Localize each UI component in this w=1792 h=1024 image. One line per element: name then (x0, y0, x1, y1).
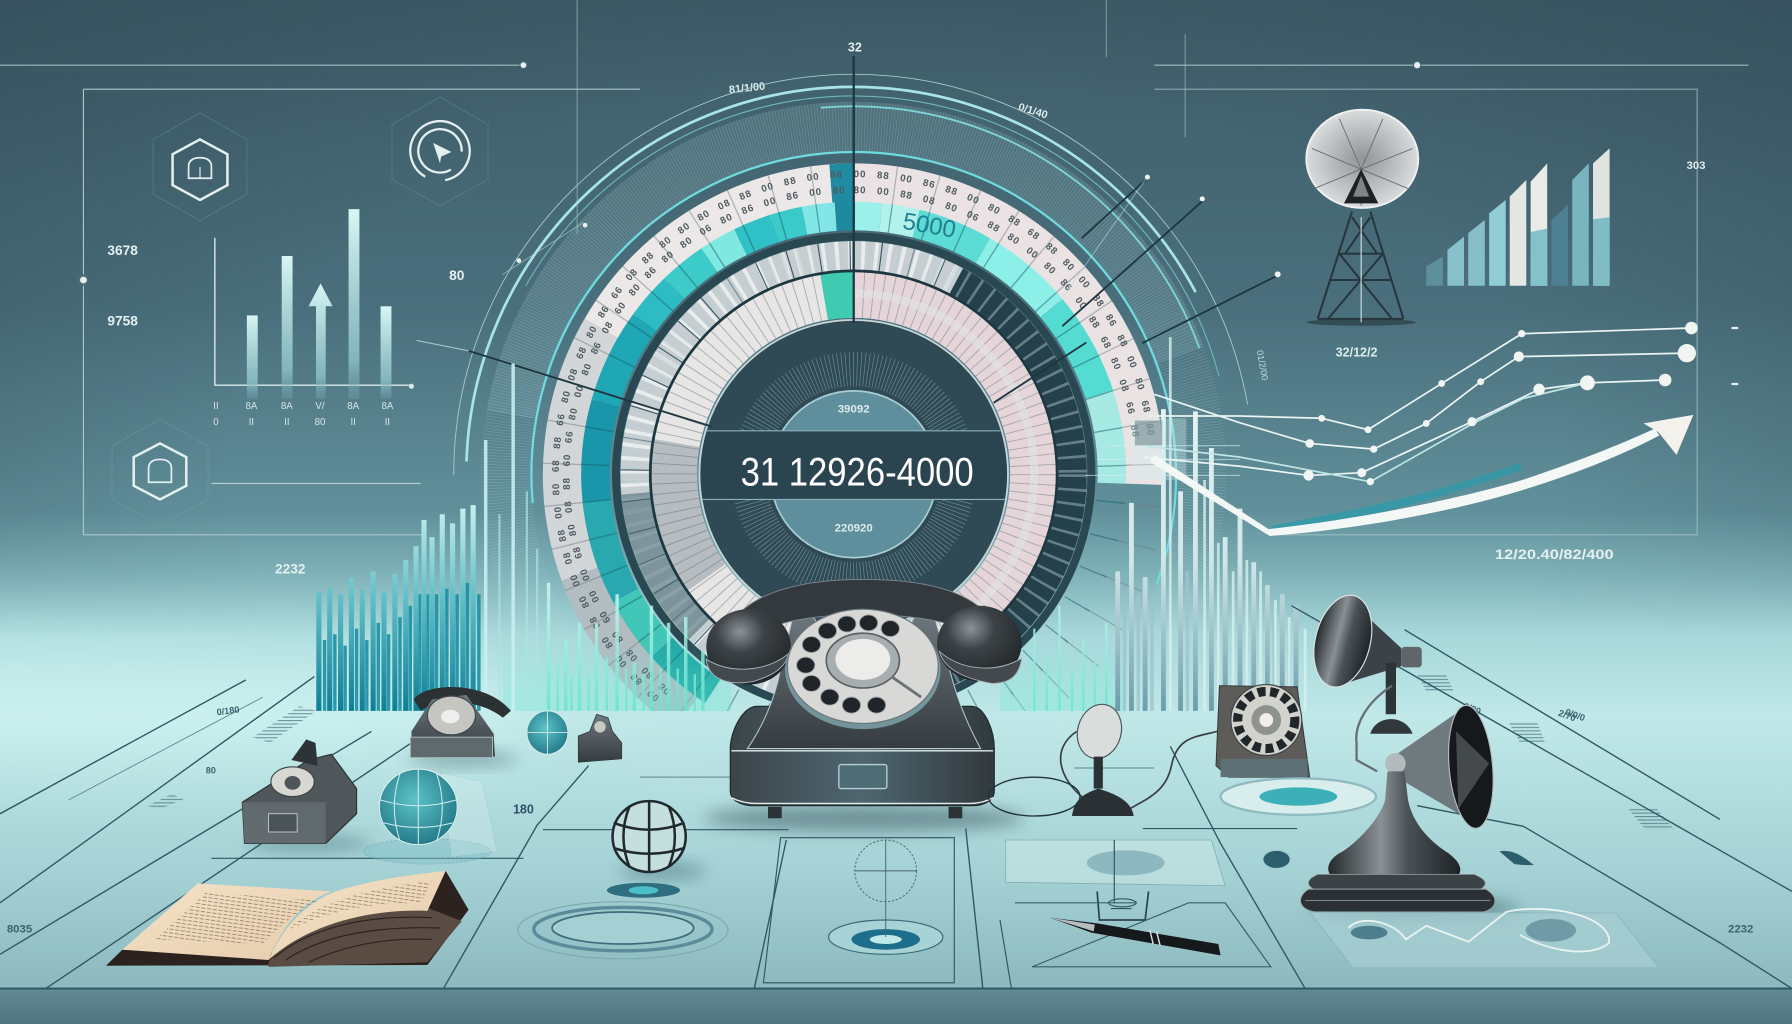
floor small labels: 0/180 (216, 704, 240, 717)
line chart right (1143, 322, 1738, 485)
icon: small rotary phone back left (408, 687, 518, 766)
label right arc: 01/2/00 (1255, 349, 1270, 381)
icon: large horn speaker (1301, 703, 1520, 921)
icon: pen (1050, 918, 1221, 955)
arc label left: 81/1/00 (728, 81, 766, 96)
arc label right: 0/1/40 (1017, 101, 1049, 122)
dish (1306, 110, 1418, 208)
floor small labels (7, 701, 1753, 936)
dark separating ring (616, 237, 1091, 712)
number ring (542, 163, 1161, 711)
tower (1318, 211, 1403, 322)
panel frame lines (0, 0, 1749, 535)
icon: tiny phone (578, 714, 622, 762)
axis tick labels: 8A (281, 401, 293, 412)
axis tick labels: 80 (315, 417, 326, 428)
icon: horn speaker back (1305, 589, 1422, 771)
icon: circular play cursor (392, 97, 488, 206)
bars (247, 209, 391, 399)
ring digits: 08 80 08 80 60 00 00 68 80 08 88 60 66 80 00 80 86 08 60 80 86 80 80 06 80 86 00 86 00 80 00 (562, 186, 844, 694)
thin dark circle (648, 270, 1058, 624)
axis tick labels (213, 401, 394, 428)
axis tick labels: II (350, 417, 356, 428)
floor small labels: 2/70 (1557, 708, 1577, 723)
base (730, 706, 994, 818)
axis tick labels: II (249, 417, 254, 428)
central rotary telephone (704, 579, 1024, 832)
ring digits: 00 88 00 80 08 80 00 08 88 00 80 68 88 66 80 08 68 80 86 66 08 88 80 80 80 08 88 00 88 00 88 00 08 (552, 170, 842, 702)
floor small labels: 180 (513, 803, 534, 817)
icon: small globe (527, 711, 568, 754)
axis tick labels: V/ (315, 401, 325, 412)
icon: wire ball (613, 801, 706, 879)
rotary dial (785, 609, 941, 729)
icon: box rotary phone (242, 739, 371, 851)
side labels left: 80 (449, 268, 465, 283)
side labels left: 3678 (107, 243, 138, 258)
UI sketch panel (1006, 840, 1271, 967)
label above band: 39092 (838, 404, 870, 416)
side labels left: 9758 (107, 314, 138, 329)
floor hatched text blocks (147, 674, 1674, 830)
mint glow behind waveform (503, 640, 1126, 711)
number band (697, 431, 1011, 499)
icon: rings under dial box (1221, 778, 1376, 815)
striped ring (620, 241, 1087, 693)
line series (1143, 328, 1691, 482)
sparkline card (1310, 909, 1659, 968)
ring digits: 80 00 88 08 80 06 88 80 00 80 86 00 88 68 80 08 66 88 00 00 (854, 186, 1139, 436)
axis tick labels: 0 (213, 417, 219, 428)
waveform bars left (319, 363, 537, 711)
label below band: 220920 (835, 522, 873, 534)
floor small labels: 0/0/0 (1564, 707, 1586, 723)
icon: hexagon gauge top left (153, 113, 247, 221)
label 32 top: 32 (848, 40, 862, 54)
data points (1155, 322, 1698, 485)
icon: satellite dish tower (1306, 110, 1418, 326)
document panel with globe sketch (763, 838, 954, 983)
axis tick labels: 8A (347, 401, 360, 412)
waveform bars middle (549, 583, 1106, 711)
dial chart rings (542, 163, 1161, 711)
ring digits (552, 170, 1154, 702)
label 2232: 2232 (275, 562, 306, 577)
bar chart: signal rising (1426, 148, 1610, 286)
pale stripe ring (649, 270, 1058, 634)
icon: open book (106, 871, 469, 967)
icon: rotary dial box (1216, 685, 1310, 777)
axis tick labels: II (284, 417, 290, 428)
label 303: 303 (1686, 160, 1706, 172)
floor small labels: 2232 (1728, 924, 1753, 936)
arrow trend (1150, 415, 1693, 536)
axis tick labels: 8A (245, 401, 258, 412)
axis tick labels: II (213, 401, 219, 412)
leader lines (417, 57, 1281, 426)
axis tick labels: II (385, 417, 390, 428)
side labels left (107, 243, 465, 329)
label bottom right range: 12/20.40/82/400 (1495, 547, 1614, 563)
icon: small mic on stand (989, 699, 1217, 816)
floor small labels: 8/80 (1462, 701, 1482, 717)
floor small labels: 8035 (7, 924, 33, 936)
body (747, 607, 981, 749)
icon: hexagon gauge bottom left (112, 419, 421, 526)
markers (1263, 850, 1534, 869)
bar chart left (213, 209, 414, 428)
teal ring segments (581, 202, 1126, 711)
translucent panel (1086, 418, 1240, 480)
label 32/12: 32/12/2 (1336, 346, 1378, 360)
waveform bars right (1118, 337, 1305, 711)
label 5000 on teal ring: 5000 (901, 208, 958, 244)
handset (706, 579, 1022, 685)
axis tick labels: 8A (381, 401, 394, 412)
phone number: 31 12926-4000 (741, 451, 974, 495)
outer arcs of the dial (337, 0, 1370, 991)
central display (697, 320, 1011, 629)
icon: wire globe with rings (363, 769, 497, 864)
ring digits: 00 88 00 86 88 00 80 88 68 88 80 00 88 86 88 00 80 68 80 80 00 88 (854, 170, 1154, 435)
icon: concentric rings bottom (518, 883, 728, 959)
floor small labels: 80 (206, 766, 216, 776)
floor grid lines (0, 606, 1792, 989)
